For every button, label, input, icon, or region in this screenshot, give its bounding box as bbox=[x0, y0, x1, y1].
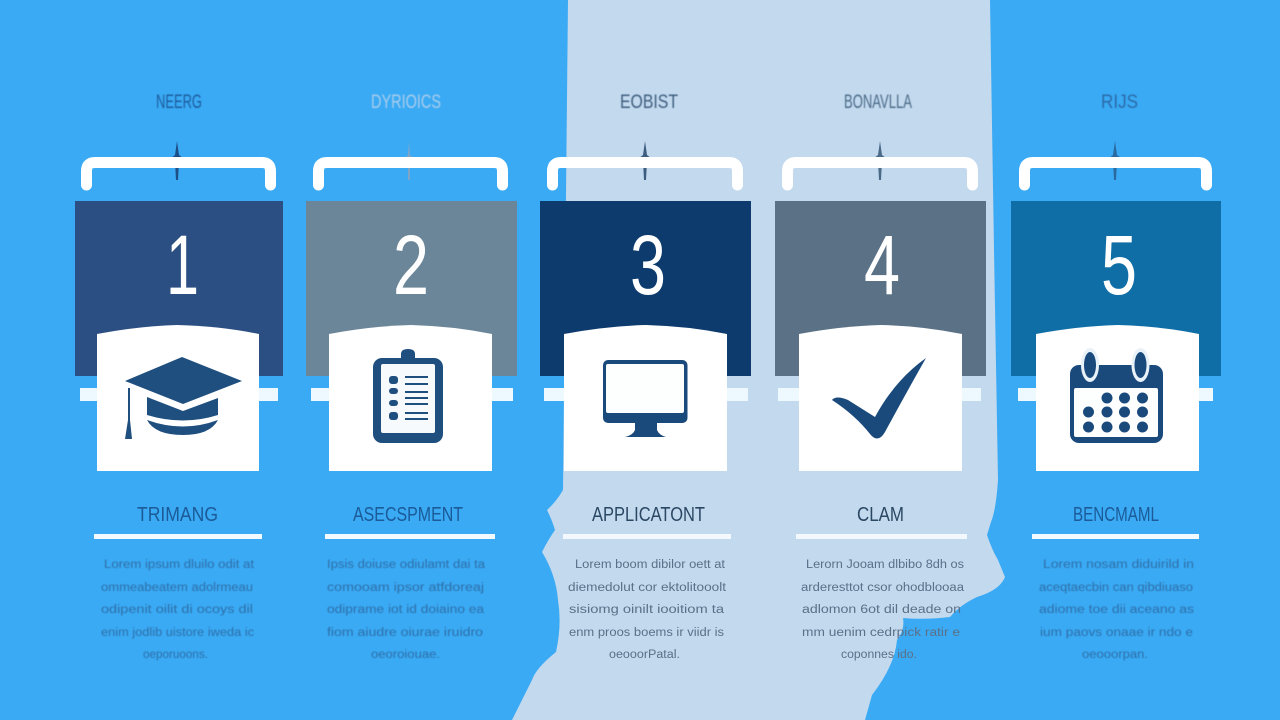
step 2 bracket bbox=[318, 162, 502, 185]
step 1 body text: odipenit oilit di ocoys dil bbox=[101, 604, 253, 616]
step 1 body text: enim jodlib uistore iweda ic bbox=[101, 627, 254, 639]
step 5 number box bbox=[1011, 201, 1221, 376]
step 4 bracket bbox=[788, 162, 972, 185]
step 2 connector bar bbox=[311, 388, 513, 401]
step 2 body text: fiom aiudre oiurae iruidro bbox=[327, 627, 483, 639]
step 3 heading: APPLICATONT bbox=[592, 504, 705, 526]
step 2 body text: oeoroiouae. bbox=[371, 649, 440, 661]
step 3 bracket bbox=[552, 162, 738, 185]
step 2 rule bbox=[325, 534, 495, 539]
step 4 number: 4 bbox=[864, 218, 900, 312]
step 2: assessment bbox=[306, 92, 517, 661]
step 1 body text: oeporuoons. bbox=[143, 649, 208, 661]
step 1 number: 1 bbox=[166, 218, 199, 312]
step 4 body text: adlomon 6ot dil deade on bbox=[802, 604, 961, 616]
step 3 body text: Lorem boom dibilor oett at bbox=[575, 559, 726, 571]
step 5 top label: RIJS bbox=[1101, 92, 1138, 113]
step 4 number box bbox=[775, 201, 986, 376]
step 5 rule bbox=[1032, 534, 1199, 539]
step 2 body text: comooam ipsor atfdoreaj bbox=[327, 582, 484, 594]
step 4: claim bbox=[775, 92, 986, 661]
icon: calendar bbox=[1070, 348, 1163, 443]
step 4 heading: CLAM bbox=[857, 504, 904, 526]
step 5 bracket bbox=[1024, 162, 1206, 185]
step 4 body text: mm uenim cedrpick ratir e bbox=[802, 627, 960, 639]
icon: graduation cap bbox=[125, 357, 242, 439]
step 3 number box bbox=[540, 201, 751, 376]
step 1 connector bar bbox=[80, 388, 278, 401]
step 2 tick bbox=[405, 141, 413, 180]
step 3 card bbox=[564, 325, 727, 471]
step 3 body text: oeooorPatal. bbox=[609, 649, 680, 661]
step 1 body text: Lorem ipsum dluilo odit at bbox=[104, 559, 255, 571]
step 5: benchmark bbox=[1011, 92, 1221, 661]
icon: monitor bbox=[603, 360, 688, 437]
step 2 card bbox=[329, 325, 492, 471]
step 5 body text: ium paovs onaae ir ndo e bbox=[1040, 627, 1193, 639]
step 5 card bbox=[1036, 325, 1199, 471]
step 1 top label: NEERG bbox=[156, 92, 202, 113]
icon: clipboard checklist bbox=[373, 349, 443, 443]
step 5 connector bar bbox=[1018, 388, 1213, 401]
step 3 number: 3 bbox=[630, 218, 666, 312]
step 1 number box bbox=[75, 201, 283, 376]
step 1 heading: TRIMANG bbox=[137, 504, 218, 526]
step 2 number: 2 bbox=[393, 218, 429, 312]
step 1 bracket bbox=[86, 162, 270, 185]
step 4 card bbox=[799, 325, 962, 471]
step 3 body text: sisiomg oinilt iooitiom ta bbox=[569, 604, 725, 616]
step 1 body text: ommeabeatem adolrmeau bbox=[101, 582, 253, 594]
step 5 number: 5 bbox=[1101, 218, 1137, 312]
step 5 body text: aceqtaecbin can qibdiuaso bbox=[1039, 582, 1193, 594]
step 3: application bbox=[540, 92, 751, 661]
step 2 body text bbox=[327, 559, 486, 661]
step 2 number box bbox=[306, 201, 517, 376]
step 3 connector bar bbox=[544, 388, 748, 401]
step 4 tick bbox=[874, 141, 886, 180]
step 3 body text: enm proos boems ir viidr is bbox=[569, 627, 724, 639]
step 3 tick bbox=[639, 141, 651, 180]
step 3 top label: EOBIST bbox=[620, 92, 678, 113]
step 5 tick bbox=[1109, 141, 1121, 180]
step 4 top label: BONAVLLA bbox=[844, 92, 912, 113]
step 4 body text: Lerorn Jooam dlbibo 8dh os bbox=[806, 559, 964, 571]
step 5 body text: Lorem nosam diduirild in bbox=[1043, 559, 1194, 571]
icon: check mark bbox=[832, 358, 926, 439]
step 3 body text bbox=[568, 559, 727, 661]
step 4 connector bar bbox=[778, 388, 981, 401]
pale torn band behind steps 3 and 4 bbox=[512, 0, 1005, 720]
step 4 rule bbox=[796, 534, 967, 539]
step 4 body text: coponnes ido. bbox=[841, 649, 917, 661]
step 1 rule bbox=[94, 534, 262, 539]
step 2 top label: DYRIOICS bbox=[371, 92, 441, 113]
step 1 tick bbox=[171, 141, 183, 180]
step 4 body text bbox=[801, 559, 965, 661]
step 2 body text: odiprame iot id doiaino ea bbox=[327, 604, 485, 616]
step 2 heading: ASECSPMENT bbox=[353, 504, 463, 526]
step 1 card bbox=[97, 325, 259, 471]
step 3 rule bbox=[563, 534, 731, 539]
step 1: training bbox=[75, 92, 283, 661]
step 2 body text: Ipsis doiuse odiulamt dai ta bbox=[327, 559, 486, 571]
step 5 body text bbox=[1039, 559, 1194, 661]
step 1 body text bbox=[101, 559, 255, 661]
step 5 body text: oeooorpan. bbox=[1082, 649, 1148, 661]
step 5 body text: adiome toe dii aceano as bbox=[1039, 604, 1194, 616]
step 4 body text: arderesttot csor ohodblooaa bbox=[801, 582, 965, 594]
step 3 body text: diemedolut cor ektolitooolt bbox=[568, 582, 727, 594]
step 5 heading: BENCMAML bbox=[1073, 504, 1159, 526]
